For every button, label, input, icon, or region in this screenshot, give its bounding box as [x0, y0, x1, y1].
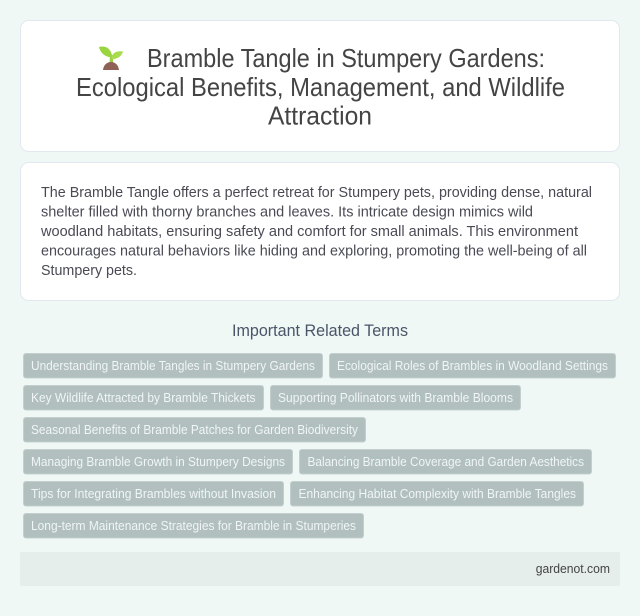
text block: description: The Bramble Tangle offers a perfect retreat for Stumpery pets, providing dense, natural [41, 184, 592, 201]
text block: description: encourages natural behaviors like hiding and exploring, promoting the well-being of all [41, 242, 587, 260]
tag: key wildlife [24, 386, 264, 410]
heading: title: Ecological Benefits, Management, and Wildlife [76, 72, 565, 102]
text block: description: woodland habitats, ensuring safety and comfort for small animals. This environment [40, 223, 579, 240]
heading: title: Bramble Tangle in Stumpery Gardens: [147, 43, 545, 73]
text block: description [40, 184, 592, 279]
icon: seedling [99, 46, 123, 70]
tag: long-term maintenance [24, 514, 364, 538]
footer source text: gardenot.com [536, 562, 610, 576]
heading: important related terms: Important Related Terms [232, 321, 408, 340]
tag: ecological roles [330, 354, 616, 378]
tag: tips for integrating: Tips for Integrating Brambles without Invasion [31, 486, 276, 501]
tag: managing bramble growth [24, 450, 292, 474]
footer [20, 552, 620, 586]
tag: understanding bramble tangles: Understanding Bramble Tangles in Stumpery Gardens [31, 358, 315, 373]
tag: long-term maintenance: Long-term Maintenance Strategies for Bramble in Stumperies [31, 518, 356, 533]
tag: enhancing habitat complexity [290, 482, 584, 506]
heading: title [76, 43, 565, 130]
text block: description: Stumpery pets. [41, 262, 137, 279]
tag: key wildlife: Key Wildlife Attracted by Bramble Thickets [31, 390, 256, 405]
tag: understanding bramble tangles [24, 354, 322, 378]
heading: title: Attraction [268, 100, 372, 130]
tag: balancing bramble coverage [300, 450, 592, 474]
tag: managing bramble growth: Managing Bramble Growth in Stumpery Designs [31, 454, 285, 469]
tag: tips for integrating [24, 482, 284, 506]
tag: supporting pollinators: Supporting Pollinators with Bramble Blooms [278, 390, 513, 405]
tag: balancing bramble coverage: Balancing Bramble Coverage and Garden Aesthetics [308, 454, 584, 469]
panel: title card [20, 20, 620, 152]
tag: enhancing habitat complexity: Enhancing Habitat Complexity with Bramble Tangles [298, 486, 576, 501]
tag: ecological roles: Ecological Roles of Brambles in Woodland Settings [337, 358, 608, 373]
tag: seasonal benefits [24, 418, 366, 442]
panel: related term tags [24, 354, 616, 538]
panel: description [20, 162, 620, 300]
text block: description: shelter filled with thorny branches and leaves. Its intricate design mimics wild [41, 204, 533, 220]
tag: supporting pollinators [270, 386, 520, 410]
tag: seasonal benefits: Seasonal Benefits of Bramble Patches for Garden Biodiversity [31, 422, 358, 437]
